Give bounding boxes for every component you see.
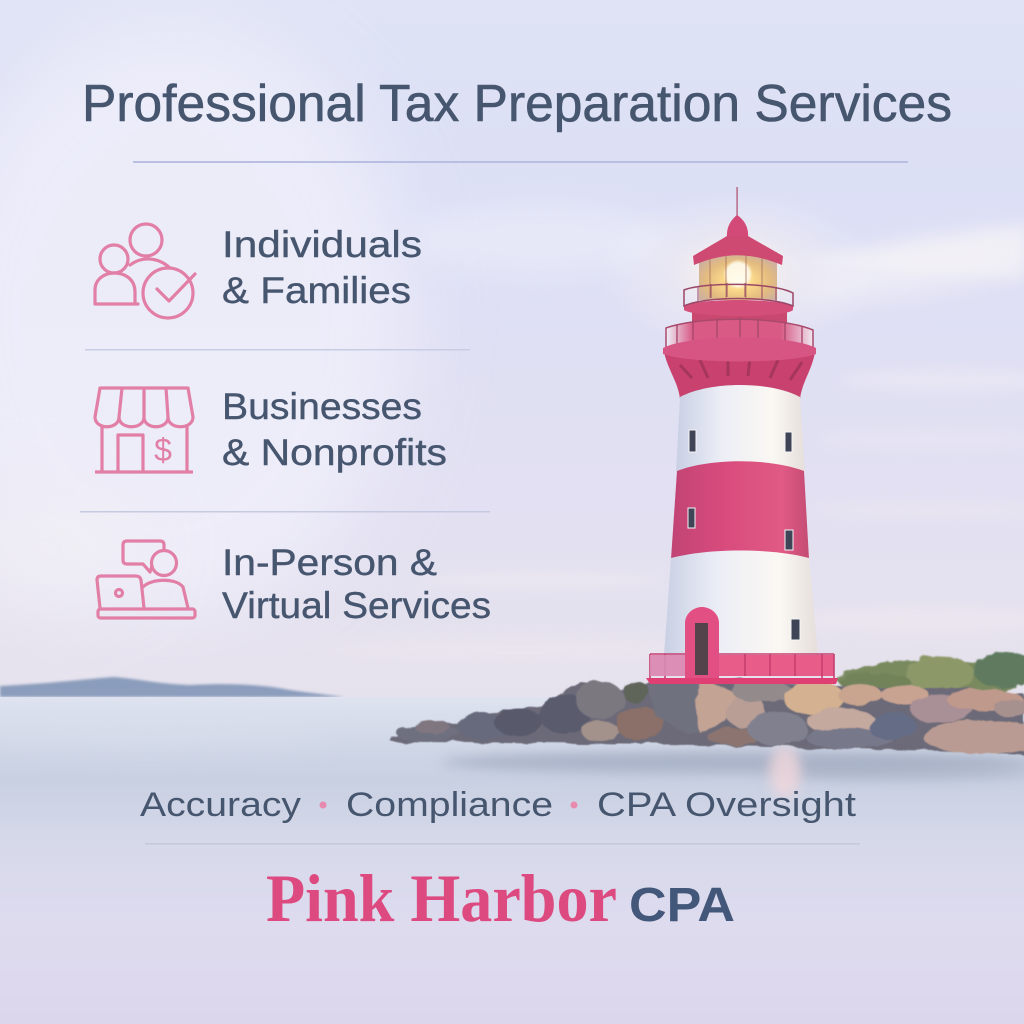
corbel head bbox=[664, 352, 815, 398]
background: sky bbox=[0, 0, 1024, 700]
windows bbox=[688, 430, 800, 640]
lantern room bbox=[699, 252, 777, 300]
divider one bbox=[85, 349, 470, 350]
tagline divider bbox=[145, 843, 860, 844]
door bbox=[685, 607, 719, 678]
logo: CPA bbox=[629, 879, 735, 932]
tagline: CPA Oversight bbox=[597, 786, 857, 824]
title divider bbox=[133, 161, 908, 163]
distant island bbox=[0, 677, 345, 697]
icon: dollar sign: $ bbox=[154, 432, 172, 468]
rocks bbox=[390, 679, 1024, 755]
roof bbox=[693, 236, 783, 265]
title: Professional Tax Preparation Services bbox=[82, 75, 952, 133]
logo: Pink Harbor bbox=[266, 860, 617, 936]
icon: consultant with laptop and speech bubble bbox=[97, 541, 195, 618]
icon: storefront bbox=[95, 388, 193, 472]
service: in-person and virtual bbox=[97, 541, 491, 626]
upper white band bbox=[676, 385, 805, 472]
label: & Nonprofits bbox=[222, 432, 447, 473]
base gallery bbox=[646, 654, 838, 684]
tagline bbox=[140, 786, 857, 824]
water bbox=[0, 697, 1024, 1024]
label: & Families bbox=[222, 270, 411, 311]
lighthouse bbox=[646, 187, 838, 684]
service: individuals and families bbox=[95, 224, 422, 318]
main gallery bbox=[663, 317, 816, 362]
tagline: Accuracy bbox=[140, 786, 301, 824]
bushes bbox=[838, 652, 1024, 700]
label: Virtual Services bbox=[222, 585, 491, 626]
lower white band bbox=[664, 550, 818, 655]
service: businesses and nonprofits bbox=[95, 386, 447, 473]
divider two bbox=[80, 511, 490, 512]
upper gallery bbox=[684, 283, 793, 330]
label: Businesses bbox=[222, 386, 422, 427]
icon: people with checkmark bbox=[95, 224, 195, 318]
pink band bbox=[671, 461, 809, 559]
label: Individuals bbox=[222, 224, 422, 265]
tagline: Compliance bbox=[346, 786, 553, 824]
label: In-Person & bbox=[222, 542, 437, 583]
spire and dome bbox=[727, 187, 748, 238]
